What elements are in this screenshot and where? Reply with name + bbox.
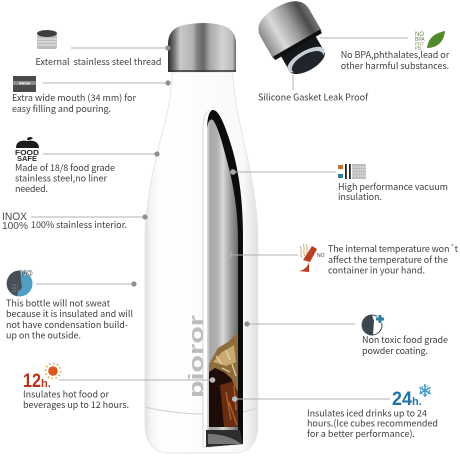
- callout: wide mouth: [12, 76, 171, 115]
- text: container in your hand.: [328, 264, 425, 277]
- bottle body: [145, 72, 258, 453]
- icon: INOX 100%: INOX: [2, 211, 28, 223]
- inner wall: [203, 110, 212, 447]
- text: No BPA,phthalates,lead or: [341, 48, 450, 61]
- text: other harmful substances.: [341, 59, 449, 72]
- text: [23, 388, 129, 411]
- icon: INOX 100%: 100%: [2, 220, 28, 232]
- text: [6, 297, 133, 342]
- text: [362, 333, 448, 357]
- leader line: [71, 45, 171, 51]
- icon: coating: [362, 315, 384, 335]
- callout: silicone gasket: [252, 0, 369, 104]
- amber liquid: [220, 380, 238, 427]
- icon: food safe: SAFE: [17, 156, 37, 163]
- leader line: [292, 75, 294, 90]
- icon: no BPA leaf: NO: [415, 32, 424, 38]
- text: [307, 407, 438, 440]
- icon: 12h sun: [23, 364, 60, 392]
- text: up on the outside.: [6, 329, 81, 342]
- icon: 12h sun: h.: [41, 378, 51, 390]
- callout: powder coating: [244, 315, 448, 357]
- icon: no heat to hand: NO: [317, 253, 325, 259]
- text: This bottle will not sweat: [6, 297, 111, 310]
- text: [341, 48, 450, 72]
- text: affect the temperature of the: [328, 253, 448, 266]
- callout: no BPA: [320, 31, 450, 72]
- text: beverages up to 12 hours.: [23, 398, 129, 411]
- leader line: [43, 151, 160, 157]
- callout: 12 hours hot: [23, 364, 215, 411]
- text: [15, 161, 115, 195]
- text: 100% stainless interior.: [31, 218, 127, 231]
- icon: thread: [37, 30, 57, 49]
- icon: food safe: [15, 137, 40, 163]
- leader line: [244, 321, 355, 327]
- text: [328, 242, 459, 277]
- callout: food safe: [15, 137, 160, 195]
- leader line: [230, 169, 336, 175]
- leader line: [232, 396, 390, 402]
- icon: removed cap: [252, 0, 336, 83]
- text: Silicone Gasket Leak Proof: [258, 90, 369, 104]
- text: Extra wide mouth (34 mm) for: [12, 91, 136, 104]
- bottom of flask: [206, 430, 243, 447]
- black plug: [280, 34, 329, 79]
- inner plug face: [288, 47, 327, 78]
- cutaway section: [203, 110, 243, 447]
- icon: vacuum layers: [338, 164, 366, 179]
- text: [12, 91, 136, 115]
- callout: 24 hours cold: [232, 384, 438, 440]
- metal cap: [252, 0, 322, 59]
- text: for a better performance).: [307, 427, 415, 440]
- leader line: [43, 80, 171, 86]
- icon: no heat to hand: [298, 244, 325, 272]
- text: High performance vacuum: [338, 180, 448, 193]
- gasket ring: [284, 42, 328, 77]
- base seam: [145, 407, 256, 414]
- text: powder coating.: [362, 344, 428, 357]
- icon: no BPA leaf: BPA: [415, 37, 425, 43]
- text: Non toxic food grade: [362, 333, 448, 346]
- text: [338, 180, 448, 203]
- leader line: [227, 252, 298, 258]
- icon: 34 mm mouth: 34mm: [19, 80, 31, 86]
- text: The internal temperature won´t: [328, 242, 459, 255]
- text: Made of 18/8 food grade: [15, 161, 115, 174]
- bottle cap: [168, 23, 236, 72]
- brand name: pioror: [186, 315, 208, 398]
- text: insulation.: [338, 190, 382, 203]
- icon: no BPA leaf: PHT: [415, 42, 424, 46]
- text: External stainless steel thread: [36, 55, 162, 68]
- text: Insulates iced drinks up to 24: [307, 407, 427, 420]
- icon: 34 mm mouth: [13, 76, 36, 92]
- leader line: [320, 37, 408, 39]
- icon: 24h snowflake: h.: [412, 396, 422, 408]
- leader line: [59, 377, 215, 383]
- leader line: [31, 214, 148, 220]
- dark liquid: [209, 345, 238, 427]
- text: hours.(Ice cubes recommended: [307, 417, 438, 430]
- text: Insulates hot food or: [23, 388, 110, 401]
- callout: stainless interior: [2, 211, 148, 232]
- text: stainless steel,no liner: [15, 172, 108, 184]
- foam: [209, 332, 238, 392]
- text: because it is insulated and will: [6, 307, 133, 320]
- callout: no sweat: [6, 269, 137, 342]
- callout: vacuum insulation: [230, 164, 448, 203]
- bottle: [145, 23, 258, 453]
- black vacuum gap: [207, 110, 243, 447]
- icon: 12h sun: 12: [23, 371, 41, 392]
- text: easy filling and pouring.: [12, 102, 111, 115]
- callout: external thread: [36, 30, 171, 68]
- icon: 24h snowflake: [392, 384, 431, 410]
- text: needed.: [15, 182, 48, 195]
- icon: food safe: FOOD: [15, 148, 40, 157]
- icon: 24h snowflake: 24: [392, 389, 412, 410]
- chrome interior: [207, 119, 238, 432]
- leader line: [36, 281, 137, 287]
- icon: no condensation: NO: [20, 269, 32, 278]
- icon: no BPA leaf: [415, 31, 445, 50]
- icon: INOX 100%: [2, 211, 28, 232]
- icon: no BPA leaf: PB: [415, 46, 421, 50]
- callout: internal temperature: [227, 242, 459, 277]
- text: not have condensation build-: [6, 318, 128, 331]
